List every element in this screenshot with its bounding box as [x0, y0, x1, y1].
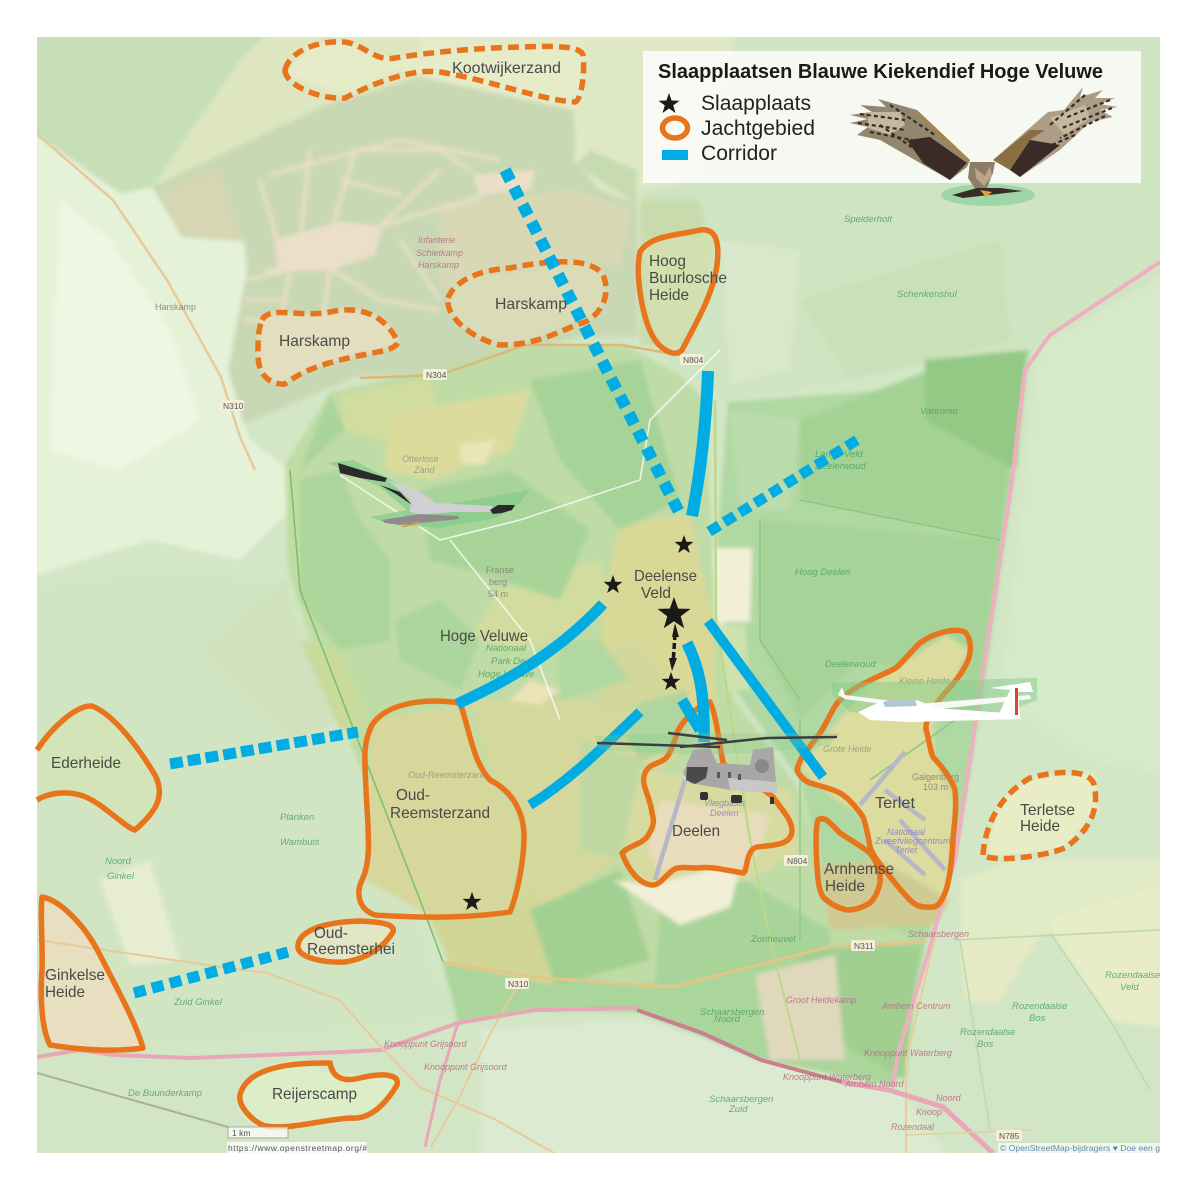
map place labels: Grote Heide: [823, 744, 872, 754]
map place labels: Spelderholt: [844, 214, 892, 225]
legend: hunting area label: Jachtgebied: [701, 117, 815, 140]
map place labels: Zuid Ginkel: [173, 997, 223, 1008]
hunting area labels: Ederheide: [51, 755, 121, 772]
corridor: curve to Deelen: [687, 643, 704, 742]
legend title: Slaapplaatsen Blauwe Kiekendief Hoge Veluwe: [658, 60, 1103, 83]
hunting area: Harskamp centre: [448, 262, 606, 345]
hunting area labels: Heide: [45, 984, 85, 1001]
corridor: north dashed: [505, 170, 681, 516]
map place labels: Rozendaalse: [1105, 970, 1160, 981]
legend: hunting area ring: [662, 118, 688, 138]
hunting area labels: Heide: [649, 287, 689, 304]
road shields: N304: [426, 370, 447, 380]
hunting area labels: Heide: [1020, 818, 1060, 835]
hunting area labels: Oud-: [314, 925, 348, 942]
map place labels: Deelerwoud: [825, 659, 876, 670]
star: south: [662, 672, 680, 690]
legend: corridor swatch: [662, 150, 688, 160]
flying harrier with green halo: [328, 460, 530, 528]
scale bar and attribution: © OpenStreetMap-bijdragers ♥ Doe een g: [1000, 1143, 1160, 1153]
map place labels: Hoog Deelen: [795, 567, 850, 578]
hunting area labels: Hoge Veluwe: [440, 628, 528, 645]
map place labels: Nationaal: [486, 643, 527, 654]
map place labels: [105, 214, 1160, 1132]
hunting area fills: [258, 310, 398, 383]
scale bar and attribution: https://www.openstreetmap.org/#: [228, 1143, 367, 1153]
roads: [37, 134, 1160, 1153]
legend: roost star: [658, 93, 680, 113]
heath Terlet: [800, 635, 970, 905]
map place labels: Bos: [977, 1039, 994, 1050]
map place labels: Hoge Veluwe: [478, 669, 534, 680]
hunting area: Hoog Buurlosche Heide: [638, 230, 718, 353]
hunting area labels: Arnhemse: [824, 861, 894, 878]
map place labels: De Buunderkamp: [128, 1088, 202, 1099]
hunting area: Deelen: [622, 702, 792, 885]
park forest patches: [300, 470, 390, 650]
map place labels: Zand: [413, 465, 436, 475]
arrow between roosts: [669, 623, 679, 671]
corridor: north-east dashed: [707, 440, 857, 533]
hunting area: Oud-Reemsterzand: [359, 701, 524, 917]
map place labels: Schaarsbergen: [908, 929, 969, 939]
map place labels: Noord: [105, 856, 132, 867]
Hoge Veluwe park: [285, 345, 925, 1020]
road shields: [220, 354, 1022, 1141]
hunting area labels: Reijerscamp: [272, 1086, 357, 1103]
military training area: [152, 77, 637, 424]
map place labels: Arnhem Centrum: [881, 1001, 951, 1011]
right wing: [993, 87, 1118, 177]
star: west: [604, 575, 622, 593]
scale bar and attribution: 1 km: [232, 1128, 250, 1138]
road shields: N804: [787, 856, 808, 866]
hunting area: Arnhemse Heide: [816, 819, 880, 910]
road shields: N310: [508, 979, 529, 989]
hunting area labels: Reemsterzand: [390, 805, 490, 822]
roost stars: [462, 535, 694, 910]
map place labels: Arnhem Noord: [844, 1079, 905, 1089]
map place labels: Rozendaalse: [1012, 1001, 1067, 1012]
hunting area labels: Kootwijkerzand: [452, 60, 561, 77]
hunting area labels: Harskamp: [495, 296, 567, 313]
hunting area: Oud-Reemsterhei: [298, 921, 393, 962]
map place labels: 103 m: [923, 782, 948, 792]
hunting area labels: Deelen: [672, 823, 720, 840]
map place labels: Otterlose: [402, 454, 439, 464]
hunting area labels: Reemsterhei: [307, 941, 395, 958]
map place labels: Knooppunt Waterberg: [783, 1072, 871, 1082]
hunting area labels: Buurlosche: [649, 270, 727, 287]
hunting area labels: [45, 60, 1075, 1103]
legend: roost label: Slaapplaats: [701, 92, 811, 115]
corridor: short to Deelen: [682, 700, 700, 730]
map place labels: Terlet: [895, 845, 918, 855]
map place labels: Zuid: [728, 1104, 748, 1115]
sand patches: [340, 379, 436, 440]
star: main: [658, 597, 690, 628]
map place labels: Planken: [280, 812, 314, 823]
road shields: N785: [999, 1131, 1020, 1141]
hunting areas: [37, 42, 1096, 1127]
hunting area: Harskamp west: [258, 310, 398, 384]
map place labels: Deelerwoud: [815, 461, 866, 472]
hunting area labels: Terletse: [1020, 802, 1075, 819]
corridor: Ederheide dashed: [170, 732, 358, 764]
map place labels: Knooppunt Waterberg: [864, 1048, 952, 1058]
hunting area labels: Ginkelse: [45, 967, 105, 984]
hunting area labels: Veld: [641, 585, 671, 602]
map place labels: Varennio: [920, 406, 958, 417]
hunting area: Terletse Heide: [983, 772, 1096, 859]
map place labels: Park De: [491, 656, 525, 667]
left wing: [850, 99, 970, 180]
map place labels: Zonheuvel: [750, 934, 796, 945]
harrier illustration: [850, 87, 1118, 206]
hunting area labels: Harskamp: [279, 333, 350, 350]
sandy track network: [244, 137, 500, 324]
map place labels: Schaarsbergen: [700, 1007, 764, 1018]
hunting area labels: Terlet: [875, 795, 916, 812]
corridor: south-east: [708, 621, 823, 777]
map place labels: Ginkel: [107, 871, 135, 882]
wing barring: [858, 95, 1112, 160]
airfield Deelen: [620, 770, 800, 890]
corridor: south-west: [457, 604, 603, 704]
map place labels: Galgenberg: [912, 772, 959, 782]
map place labels: Knooppunt Grijsoord: [384, 1039, 468, 1049]
legend: corridor label: Corridor: [701, 142, 777, 165]
body and tail: [968, 162, 995, 190]
map place labels: Franse: [486, 565, 514, 575]
map place labels: Noord: [936, 1093, 962, 1103]
map place labels: Harskamp: [418, 260, 459, 270]
corridor: Hoog Buurlo: [692, 371, 708, 516]
hunting area: Ginkelse Heide: [41, 897, 143, 1050]
map place labels: Schietkamp: [416, 248, 463, 258]
map place labels: Groot Heidekamp: [786, 995, 857, 1005]
hunting area labels: Oud-: [396, 787, 430, 804]
corridor: Ginkelse Heide dashed: [134, 952, 288, 993]
map place labels: Lange Veld: [815, 449, 863, 460]
legend panel: [643, 51, 1141, 183]
helicopter: [595, 733, 840, 804]
map place labels: Knoop: [916, 1107, 942, 1117]
hunting area labels: Heide: [825, 878, 865, 895]
map place labels: Bos: [1029, 1013, 1046, 1024]
map place labels: Knooppunt Grijsoord: [424, 1062, 508, 1072]
star: north: [674, 535, 694, 553]
hunting area: Ederheide: [37, 706, 159, 830]
map place labels: Zweefvliegcentrum: [874, 836, 951, 846]
map place labels: Noord: [714, 1014, 741, 1025]
road shields: N310: [223, 401, 244, 411]
map place labels: Infanterie: [418, 235, 456, 245]
map place labels: Rozendaalse: [960, 1027, 1015, 1038]
road shields: N311: [854, 941, 874, 951]
glider: [832, 678, 1037, 722]
map place labels: Kleine Heide: [899, 676, 950, 686]
map place labels: Vliegbasis: [704, 798, 746, 808]
runways: [655, 752, 945, 880]
hunting area labels: Deelense: [634, 568, 697, 585]
hunting area: Terlet: [797, 630, 970, 907]
road shields: N804: [683, 355, 704, 365]
map place labels: Harskamp: [155, 302, 196, 312]
hunting area labels: Hoog: [649, 253, 686, 270]
corridors: [134, 170, 857, 993]
map place labels: Nationaal: [887, 827, 926, 837]
corridor: south: [530, 712, 640, 805]
map place labels: 54 m: [488, 589, 508, 599]
star: Oud-Reemsterzand: [462, 892, 482, 910]
hunting area: Kootwijkerzand: [285, 42, 584, 102]
map place labels: Deelen: [710, 808, 739, 818]
map place labels: Wambuis: [280, 837, 320, 848]
map place labels: Rozendaal: [891, 1122, 935, 1132]
map place labels: Schaarsbergen: [709, 1094, 773, 1105]
map place labels: Schenkenshul: [897, 289, 958, 300]
scale bar and attribution: [227, 1127, 1160, 1153]
map place labels: Oud-Reemsterzand: [408, 770, 488, 780]
hunting area: Reijerscamp: [240, 1063, 397, 1127]
map place labels: berg: [489, 577, 507, 587]
map place labels: Veld: [1120, 982, 1139, 993]
